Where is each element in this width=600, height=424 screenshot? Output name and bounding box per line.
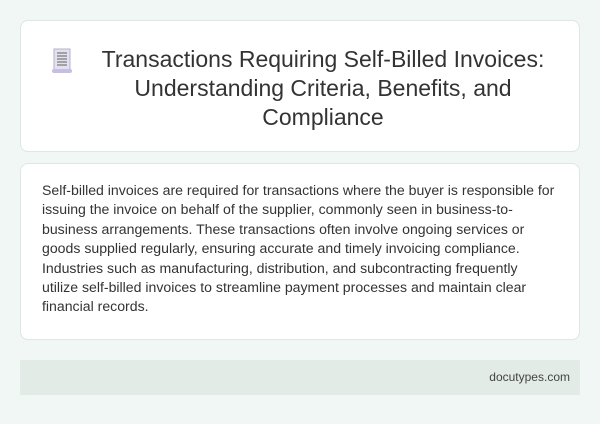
body text: issuing the invoice on behalf of the supplier, commonly seen in business-to-	[42, 201, 513, 217]
body text: goods supplied regularly, ensuring accurate and timely invoicing compliance.	[42, 240, 520, 256]
icon: document	[52, 48, 72, 73]
title: Transactions Requiring Self-Billed Invoices: Understanding Criteria, Benefits, and Compliance	[102, 46, 544, 130]
body text: business arrangements. These transactions often involve ongoing services or	[42, 221, 524, 237]
body text	[42, 182, 554, 314]
body text: Self-billed invoices are required for transactions where the buyer is responsible for	[42, 182, 554, 198]
header panel	[20, 20, 580, 152]
body text: financial records.	[42, 298, 149, 314]
body text: utilize self-billed invoices to streamline payment processes and maintain clear	[42, 279, 526, 295]
footer text: docutypes.com: docutypes.com	[489, 370, 570, 384]
body text: Industries such as manufacturing, distribution, and subcontracting frequently	[42, 260, 518, 276]
description panel	[20, 163, 580, 340]
footer	[20, 360, 580, 395]
